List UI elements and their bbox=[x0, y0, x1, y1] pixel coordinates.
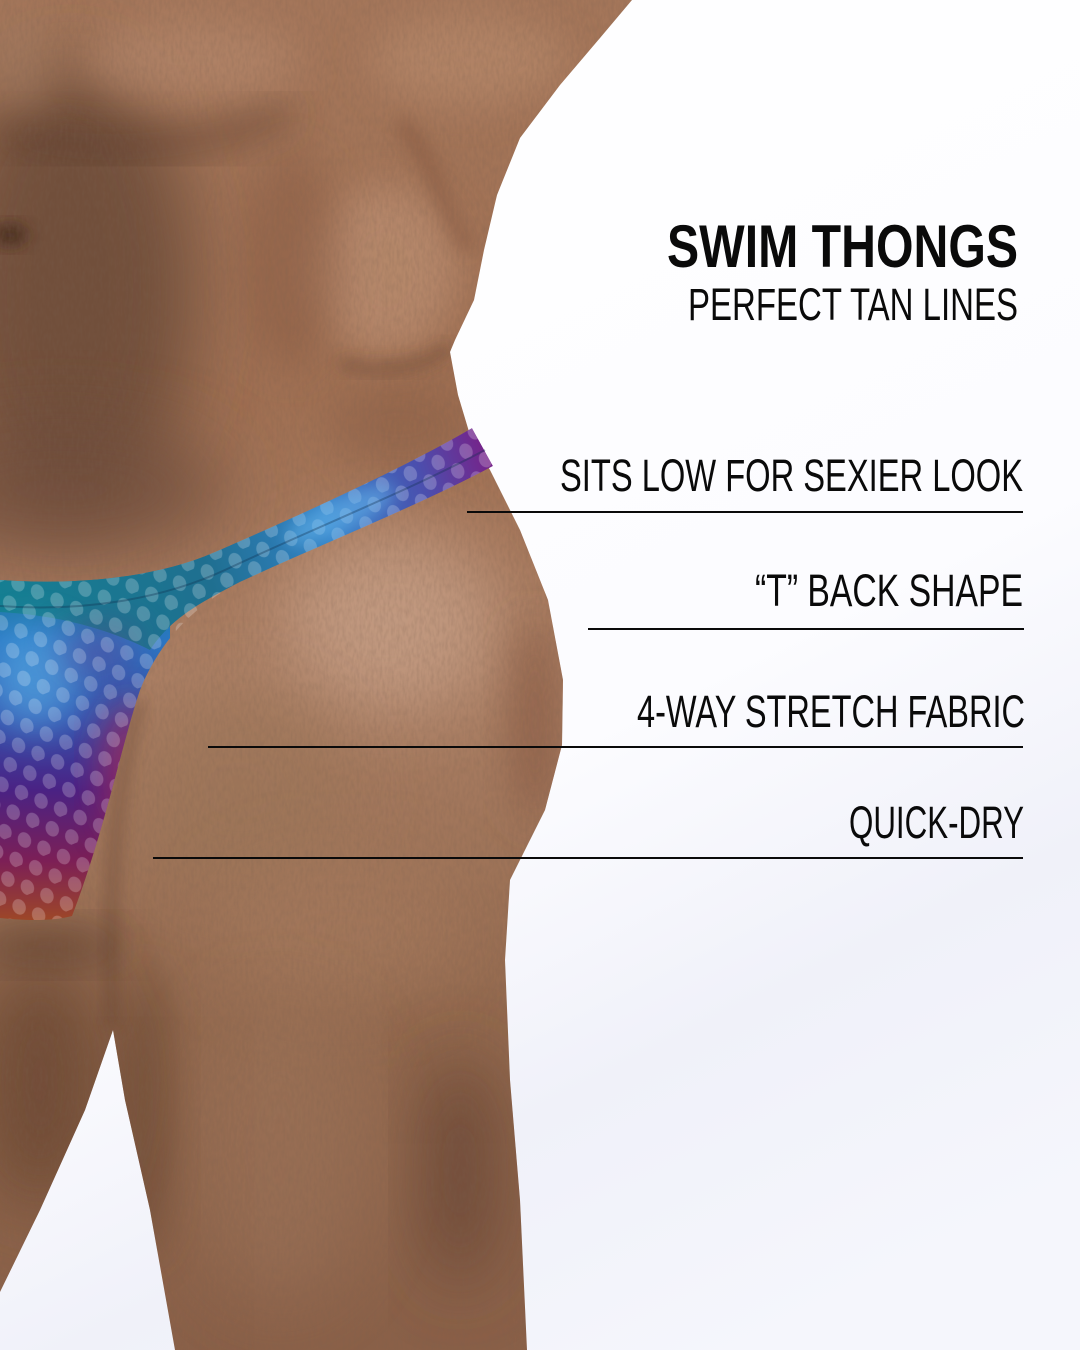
garment: multicolour dotted swimwear bbox=[0, 420, 500, 930]
shading: hip and thigh bbox=[0, 530, 561, 1300]
shading: ribs and arm bbox=[240, 15, 570, 465]
skin texture bbox=[117, 2, 604, 772]
figure: torso and legs bbox=[0, 0, 632, 1350]
shading: chest and body hair bbox=[0, 10, 300, 560]
